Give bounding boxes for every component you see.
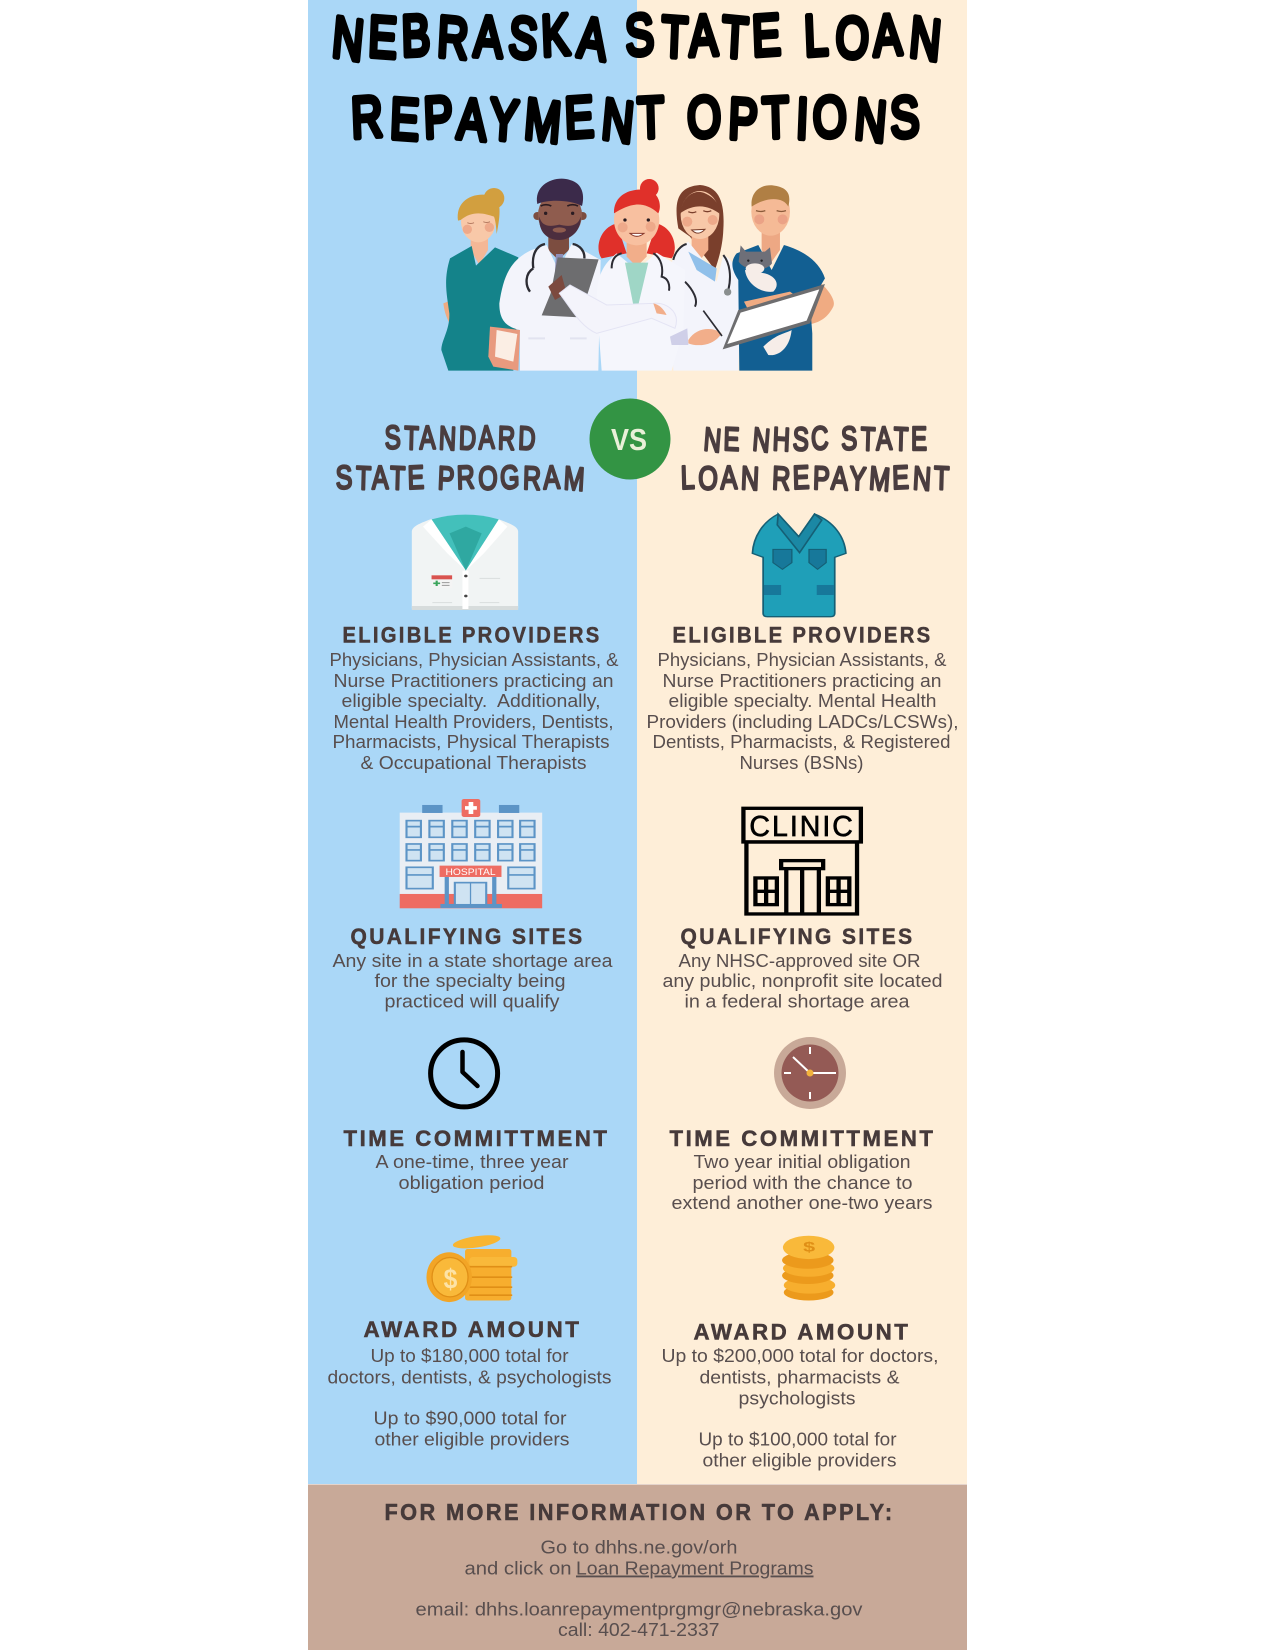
footer contact text: Loan Repayment Programs xyxy=(576,1558,814,1578)
block: standard qualifying sites: QUALIFYING SITES xyxy=(350,924,584,949)
block: NHSC time commitment: extend another one-two years xyxy=(672,1192,932,1213)
block: NHSC qualifying sites: QUALIFYING SITES xyxy=(680,924,914,949)
block: standard time commitment xyxy=(344,1126,610,1193)
title: REPAYMENT OPTIONS xyxy=(349,84,927,155)
title: NEBRASKA STATE LOAN xyxy=(329,2,951,73)
footer contact text: email: dhhs.loanrepaymentprgmgr@nebraska.gov xyxy=(416,1598,863,1620)
block: standard award amount: doctors, dentists, & psychologists xyxy=(328,1366,612,1388)
block: standard eligible providers xyxy=(330,622,619,773)
block: NHSC qualifying sites: any public, nonprofit site located xyxy=(662,970,942,991)
footer contact text: Go to dhhs.ne.gov/orh xyxy=(540,1537,738,1558)
footer contact text xyxy=(416,1537,863,1640)
block: NHSC eligible providers xyxy=(646,622,958,773)
nurse 5 with cat xyxy=(723,185,834,371)
block: standard qualifying sites: for the specialty being xyxy=(374,970,566,991)
block: standard award amount xyxy=(328,1317,612,1450)
block: NHSC award amount: psychologists xyxy=(738,1388,856,1408)
block: NHSC time commitment xyxy=(670,1126,936,1213)
block: NHSC eligible providers: ELIGIBLE PROVIDERS xyxy=(672,622,932,648)
icon: lab coat xyxy=(412,515,518,610)
block: NHSC award amount xyxy=(662,1320,938,1470)
block: NHSC qualifying sites xyxy=(662,924,942,1012)
nurse 1 xyxy=(441,188,520,371)
block: NHSC award amount: other eligible providers xyxy=(702,1450,896,1470)
icon: clinic: CLINIC xyxy=(749,810,855,842)
block: standard eligible providers: Pharmacists, Physical Therapists xyxy=(332,731,610,752)
icon: scrubs top xyxy=(752,514,846,617)
subheading: NE NHSC state loan repayment: NE NHSC STATE xyxy=(702,419,930,459)
block: standard award amount: other eligible providers xyxy=(374,1428,570,1450)
icon: brown wall clock xyxy=(774,1037,846,1109)
block: standard award amount: Up to $90,000 total for xyxy=(374,1408,566,1428)
block: standard time commitment: TIME COMMITTMENT xyxy=(344,1126,610,1151)
block: standard qualifying sites xyxy=(332,924,613,1012)
panel: NE NHSC background xyxy=(637,0,967,1484)
subheading: standard state program xyxy=(335,418,589,498)
block: NHSC award amount: Up to $100,000 total for xyxy=(698,1428,896,1450)
block: standard eligible providers: eligible specialty. Additionally, xyxy=(342,690,600,711)
block: NHSC eligible providers: Dentists, Pharmacists, & Registered xyxy=(652,731,950,752)
doctor 4 xyxy=(670,185,741,371)
block: NHSC qualifying sites: in a federal shortage area xyxy=(684,990,910,1012)
icon: coin stack with coin xyxy=(426,1233,517,1302)
block: NHSC time commitment: Two year initial obligation xyxy=(694,1151,910,1172)
doctor 2 xyxy=(499,179,601,371)
icon: black outline clock xyxy=(431,1040,498,1107)
illustration: healthcare team xyxy=(441,179,834,371)
panel: footer xyxy=(308,1484,967,1650)
block: NHSC time commitment: period with the chance to xyxy=(692,1172,912,1193)
icon: coin stack xyxy=(782,1236,835,1300)
block: standard time commitment: obligation period xyxy=(398,1172,544,1193)
block: NHSC eligible providers: Physicians, Physician Assistants, & xyxy=(658,649,947,670)
block: NHSC eligible providers: Nurse Practitioners practicing an xyxy=(662,670,942,691)
block: NHSC time commitment: TIME COMMITTMENT xyxy=(670,1126,936,1151)
block: NHSC award amount: AWARD AMOUNT xyxy=(694,1320,910,1344)
icon: hospital xyxy=(400,799,542,908)
icon: clinic xyxy=(743,808,861,914)
block: standard eligible providers: Physicians, Physician Assistants, & xyxy=(330,649,619,670)
footer heading: FOR MORE INFORMATION OR TO APPLY: xyxy=(384,1499,894,1525)
subheading: standard state program: STANDARD xyxy=(384,418,540,457)
block: standard eligible providers: Mental Health Providers, Dentists, xyxy=(334,711,614,732)
footer contact text: and click on xyxy=(464,1558,572,1578)
block: standard eligible providers: Nurse Practitioners practicing an xyxy=(334,670,614,691)
subheading: NE NHSC state loan repayment xyxy=(680,419,953,498)
panel: standard state program background xyxy=(308,0,637,1484)
block: NHSC eligible providers: Nurses (BSNs) xyxy=(740,752,864,773)
icon: coin stack with coin: $ xyxy=(444,1264,457,1295)
block: standard qualifying sites: practiced will qualify xyxy=(384,990,560,1012)
subheading: NE NHSC state loan repayment: LOAN REPAYMENT xyxy=(680,458,953,498)
block: NHSC award amount: dentists, pharmacists & xyxy=(700,1366,900,1388)
icon: hospital: HOSPITAL xyxy=(446,868,496,878)
subheading: standard state program: STATE PROGRAM xyxy=(335,458,589,498)
block: NHSC qualifying sites: Any NHSC-approved site OR xyxy=(678,950,920,971)
doctor 3 xyxy=(559,179,688,371)
block: standard award amount: AWARD AMOUNT xyxy=(364,1317,582,1342)
block: standard award amount: Up to $180,000 total for xyxy=(370,1345,568,1366)
block: NHSC eligible providers: Providers (including LADCs/LCSWs), xyxy=(646,711,958,732)
footer contact text: call: 402-471-2337 xyxy=(558,1619,720,1640)
vs badge: VS xyxy=(611,422,647,457)
block: NHSC eligible providers: eligible specialty. Mental Health xyxy=(668,690,936,711)
block: standard eligible providers: & Occupational Therapists xyxy=(360,752,586,773)
block: standard time commitment: A one-time, three year xyxy=(376,1151,568,1172)
block: standard qualifying sites: Any site in a state shortage area xyxy=(332,950,613,971)
vs badge xyxy=(590,398,670,480)
title xyxy=(329,2,951,155)
block: standard eligible providers: ELIGIBLE PROVIDERS xyxy=(342,622,602,648)
icon: coin stack: $ xyxy=(803,1239,815,1254)
block: NHSC award amount: Up to $200,000 total for doctors, xyxy=(662,1345,938,1366)
